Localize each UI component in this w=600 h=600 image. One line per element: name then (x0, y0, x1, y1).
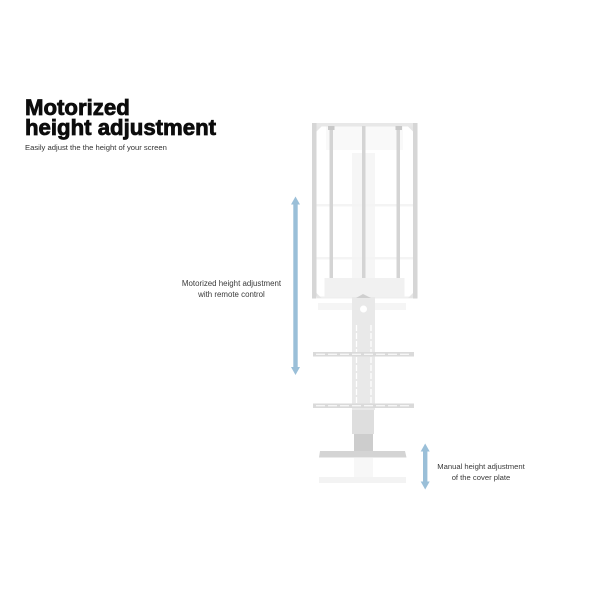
title: Motorized (25, 94, 130, 120)
ghost: upper position parts (315, 126, 413, 310)
base plate (319, 451, 406, 458)
ghost: cover plate lower position (319, 458, 406, 483)
arrow: manual range (421, 444, 430, 490)
mounting plate (324, 278, 404, 297)
screen frame (312, 123, 418, 298)
lower bracket (313, 404, 414, 408)
label: manual adjustment (437, 462, 525, 482)
title: height adjustment (25, 114, 216, 140)
motor housing (352, 410, 374, 452)
subtitle: Easily adjust the the height of your screen (25, 143, 167, 152)
label: manual adjustment: of the cover plate (452, 472, 510, 482)
label: motorized adjustment: Motorized height adjustment (182, 278, 281, 288)
arrow: motorized range (291, 196, 300, 375)
title (25, 94, 216, 140)
column (352, 294, 375, 410)
mounting rods (328, 126, 402, 278)
label: motorized adjustment (182, 278, 281, 298)
label: manual adjustment: Manual height adjustment (437, 462, 525, 470)
upper bracket (313, 352, 414, 356)
label: motorized adjustment: with remote control (198, 290, 265, 298)
